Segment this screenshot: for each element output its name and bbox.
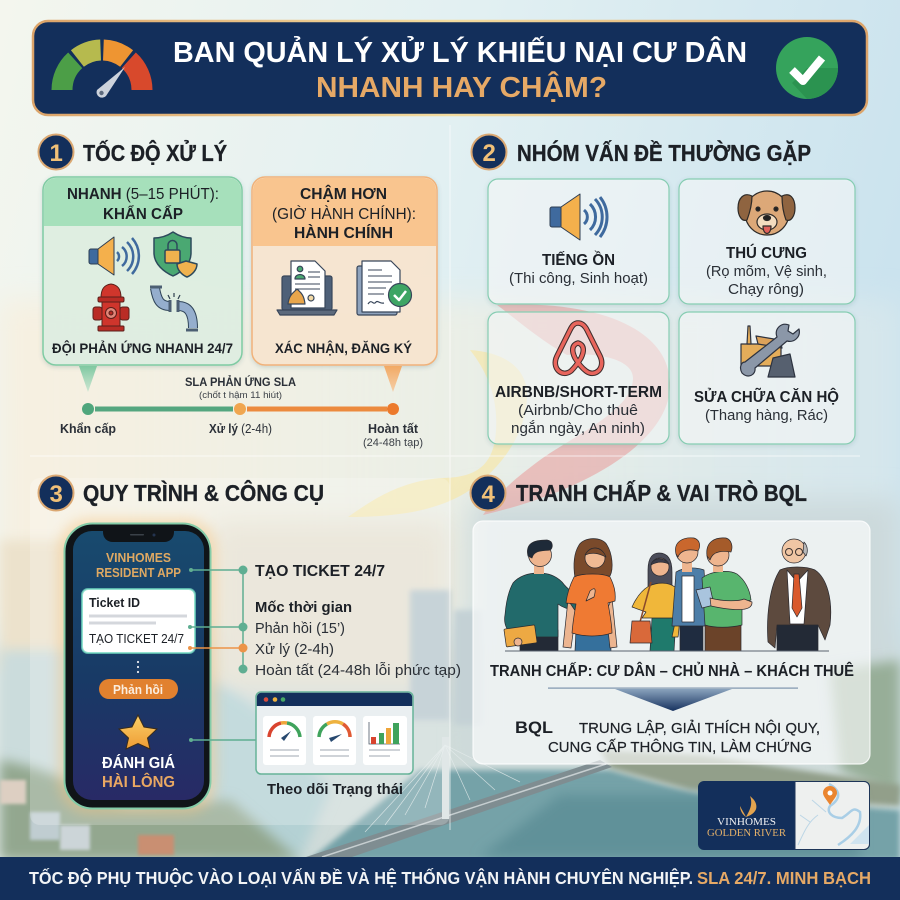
card: pets (679, 179, 855, 304)
text: management role: BQL (515, 718, 553, 737)
card: noise: TIẾNG ỒN (542, 250, 615, 269)
logo card with location map (698, 781, 870, 850)
text: app name (96, 550, 181, 580)
ticket card: Ticket ID (89, 596, 140, 610)
text: ticket milestones (255, 563, 461, 679)
arrow: pointer from slow panel (384, 366, 402, 392)
bridge deck and pylon, decorative (306, 760, 612, 857)
button: feedback (99, 679, 178, 699)
text: ticket milestones: TẠO TICKET 24/7 (255, 563, 385, 580)
card: pets: THÚ CƯNG (726, 243, 807, 262)
panel: slower administrative (252, 177, 437, 365)
text: satisfaction rating: ĐÁNH GIÁ (102, 755, 175, 772)
connectors: phone to milestones (188, 566, 256, 742)
phone glow, decorative (58, 518, 217, 814)
icon: security shield (154, 232, 197, 277)
heading 1 (38, 134, 227, 170)
heading: main title: NHANH HAY CHẬM? (316, 70, 607, 104)
heading 3 (38, 476, 324, 510)
woman in orange shirt (563, 539, 617, 651)
icon: rating star (119, 715, 157, 749)
panel: disputes (473, 521, 870, 764)
logo: Vinhomes Golden River: VINHOMES (717, 816, 776, 828)
heading: main title: BAN QUẢN LÝ XỬ LÝ KHIẾU NẠI CƯ DÂN (173, 35, 747, 69)
icon: fire hydrant (93, 284, 129, 331)
caption: status tracking: Theo dõi Trạng thái (267, 782, 403, 798)
heading 2: 2 (482, 140, 496, 167)
arrow: pointer from fast panel (79, 366, 97, 392)
chart: SLA timeline: Khẩn cấp (60, 422, 116, 436)
arrow: downward chevron (615, 689, 732, 711)
text: SLA heading: SLA PHẢN ỨNG SLA (185, 376, 296, 389)
text: ticket milestones: Xử lý (2-4h) (255, 642, 334, 658)
text: satisfaction rating: HÀI LÔNG (102, 773, 175, 791)
chart: SLA timeline (60, 403, 423, 449)
panel: fast urgent (43, 177, 242, 365)
heading 3: QUY TRÌNH & CÔNG CỤ (83, 479, 324, 506)
heading 1: 1 (50, 140, 63, 167)
section 4: disputes and management role (470, 476, 870, 764)
man in green tee with tablet (696, 538, 752, 651)
logo: Vinhomes Golden River: GOLDEN RIVER (707, 827, 787, 839)
text: ticket milestones: Phản hồi (15’) (255, 621, 345, 637)
mini gauge 2 (313, 716, 356, 765)
phone: resident app (64, 524, 210, 808)
heading 4: 4 (482, 481, 496, 508)
text: management role: CUNG CẤP THÔNG TIN, LÀM CHỨNG (548, 739, 812, 756)
panel: fast urgent: NHANH (5–15 PHÚT): (67, 184, 219, 203)
panel: slower administrative: CHẬM HƠN (300, 184, 387, 203)
heading 2 (472, 134, 811, 170)
card: apartment repair (679, 312, 855, 444)
text: satisfaction rating (102, 755, 175, 791)
text: management role: TRUNG LẬP, GIẢI THÍCH NỘI QUY, (579, 720, 820, 737)
text: SLA heading: (chốt t hậm 11 hiút) (199, 390, 282, 401)
text: ticket milestones: Hoàn tất (24-48h lỗi phức tạp) (255, 662, 461, 679)
card: pets: Chạy rông) (728, 282, 804, 298)
icon: leaking pipe (150, 287, 198, 330)
card: noise (488, 179, 669, 304)
logo: Vinhomes Golden River (707, 796, 787, 839)
button: feedback: Phản hồi (113, 683, 163, 697)
dashboard: status tracking (256, 692, 413, 774)
ticket card (82, 589, 195, 653)
card: apartment repair: (Thang hàng, Rác) (705, 408, 828, 424)
panel: fast urgent: ĐỘI PHẢN ỨNG NHANH 24/7 (52, 339, 233, 356)
icon: speedometer gauge (62, 50, 142, 98)
text: ticket milestones: Mốc thời gian (255, 600, 352, 616)
icon: green check badge (776, 37, 838, 99)
card: apartment repair: SỬA CHỮA CĂN HỘ (694, 386, 839, 406)
text: app name: VINHOMES (106, 550, 171, 565)
panel: slower administrative: XÁC NHẬN, ĐĂNG KÝ (275, 339, 413, 356)
panel: slower administrative: HÀNH CHÍNH (294, 223, 393, 242)
ticket card: TẠO TICKET 24/7 (89, 632, 184, 646)
heading 4 (470, 476, 807, 510)
man in teal sweater (504, 540, 598, 651)
section 2: common issues (472, 134, 855, 444)
mini bar chart (363, 716, 407, 765)
panel: slower administrative: (GIỜ HÀNH CHÍNH): (272, 204, 416, 223)
icon: dog face (738, 191, 795, 235)
text: app name: RESIDENT APP (96, 565, 181, 580)
panel: fast urgent: KHẨN CẤP (103, 204, 183, 223)
icon: laptop with form (277, 261, 337, 315)
text: management role (515, 718, 820, 756)
older manager in brown suit (768, 539, 831, 651)
woman in yellow top with bag (630, 553, 679, 651)
card: airbnb short-term: ngắn ngày, An ninh) (511, 420, 645, 437)
footer banner: TỐC ĐỘ PHỤ THUỘC VÀO LOẠI VẤN ĐỀ VÀ HỆ THỐNG VẬN HÀNH CHUYÊN NGHIỆP. (29, 867, 693, 888)
card: pets: (Rọ mõm, Vệ sinh, (706, 264, 827, 280)
icon: signed document (357, 261, 412, 315)
heading 2: NHÓM VẤN ĐỀ THƯỜNG GẶP (517, 139, 811, 166)
glass panel behind section 3 (30, 478, 450, 825)
icon: loudspeaker (89, 237, 139, 275)
icon: airbnb symbol (555, 323, 602, 373)
illustration: residents, landlord, tenant and manager (504, 538, 831, 651)
heading 4: TRANH CHẤP & VAI TRÒ BQL (516, 479, 807, 506)
card: noise: (Thi công, Sinh hoạt) (509, 271, 648, 287)
title banner (33, 21, 867, 115)
map (795, 782, 870, 850)
man in denim jacket (672, 538, 708, 651)
footer banner: SLA 24/7. MINH BẠCH (697, 868, 871, 888)
watermark: red and yellow D logo (348, 304, 670, 517)
chart: SLA timeline: Xử lý (2-4h) (209, 422, 272, 436)
icon: repair tools (741, 324, 799, 377)
card: airbnb short-term (488, 312, 669, 444)
icon: loudspeaker (550, 194, 607, 240)
text: dispute parties: TRANH CHẤP: CƯ DÂN – CHỦ NHÀ – KHÁCH THUÊ (490, 662, 854, 680)
card: airbnb short-term: (Airbnb/Cho thuê (518, 403, 638, 419)
heading: main title (173, 35, 747, 104)
mini gauge 1 (263, 716, 306, 765)
section 3: process and tools (38, 476, 461, 814)
chart: SLA timeline: Hoàn tất (368, 422, 419, 436)
footer banner (0, 857, 900, 900)
section 1: processing speed (38, 134, 437, 449)
chart: SLA timeline: (24-48h tạp) (363, 437, 423, 449)
heading 1: TỐC ĐỘ XỬ LÝ (83, 138, 227, 166)
heading 3: 3 (50, 481, 63, 508)
card: airbnb short-term: AIRBNB/SHORT-TERM (495, 384, 662, 401)
text: SLA heading (185, 376, 296, 401)
